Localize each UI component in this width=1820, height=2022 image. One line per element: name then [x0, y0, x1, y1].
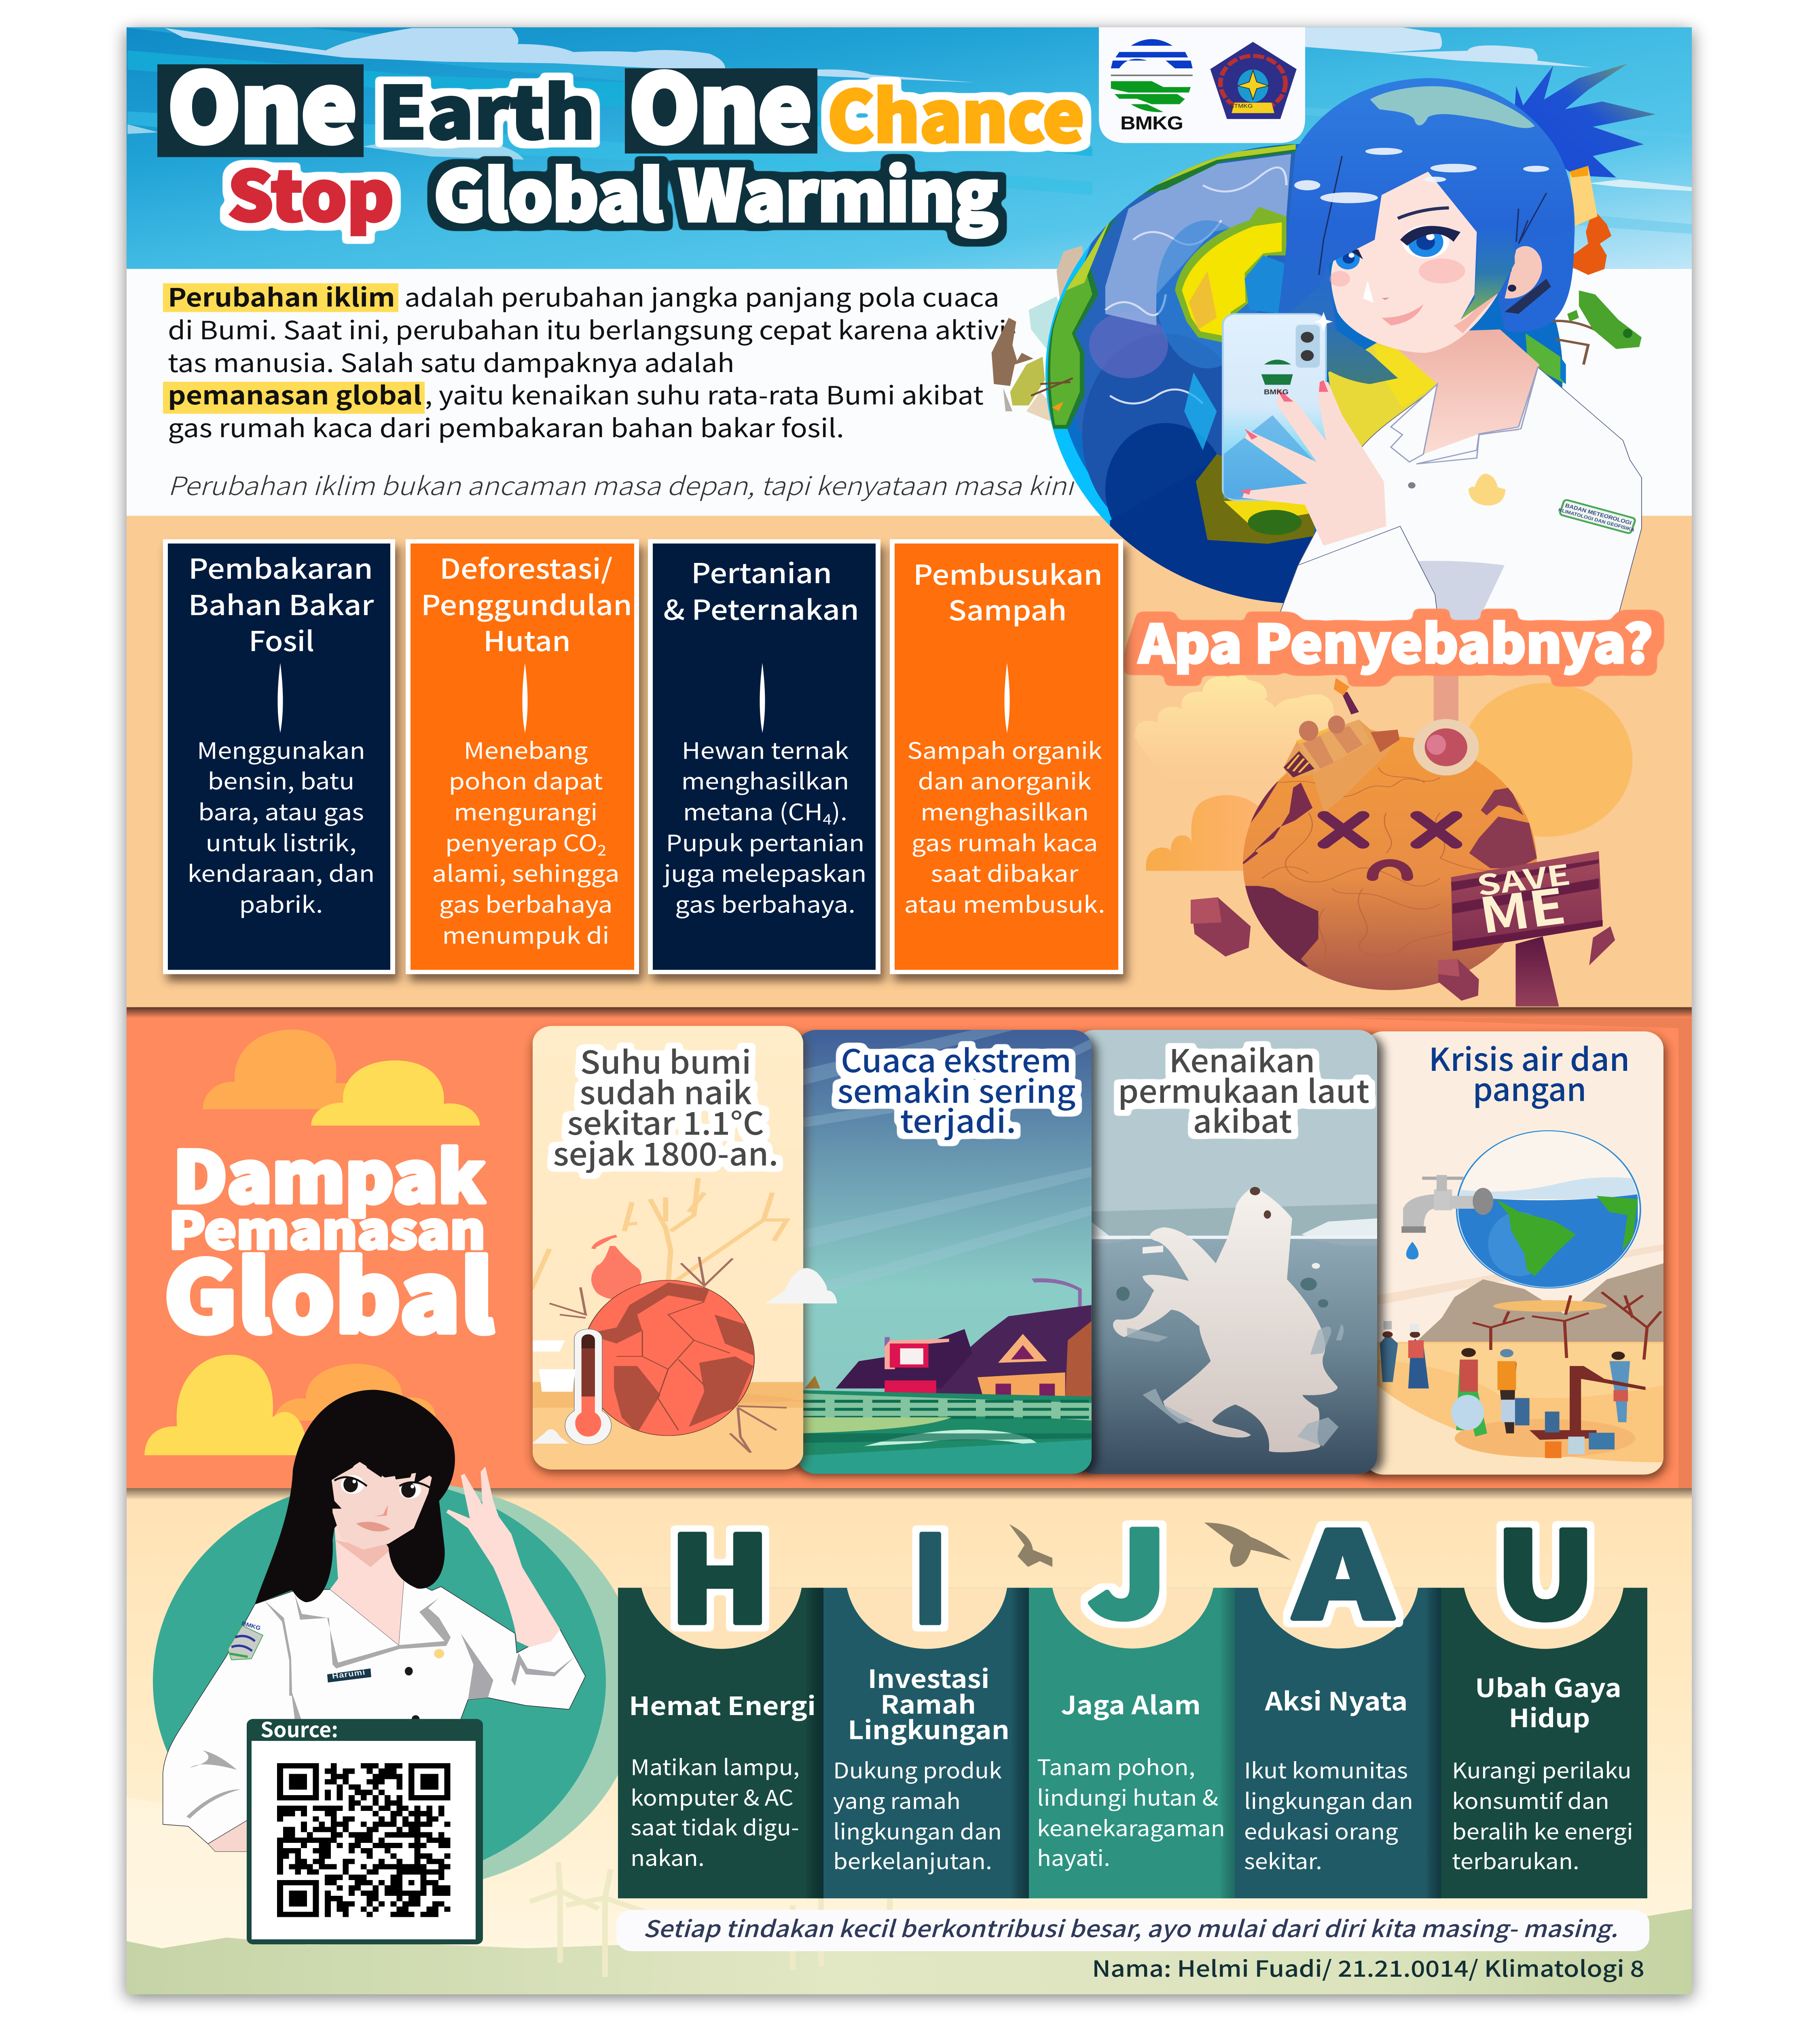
closing message pill: Setiap tindakan kecil berkontribusi besar, ayo mulai dari diri kita masing- masing.	[643, 1911, 1618, 1944]
card: waste: Pembusukan	[913, 553, 1103, 593]
illustration: girl with peace sign	[163, 1390, 585, 1852]
heading: Dampak Pemanasan Global: Global	[164, 1220, 494, 1360]
card: fossil fuel: kendaraan, dan	[188, 856, 375, 888]
card: deforestation: alami, sehingga	[432, 856, 620, 888]
factory	[1284, 719, 1399, 813]
card: waste: dan anorganik	[918, 764, 1092, 796]
intro text block: tas manusia. Salah satu dampaknya adalah	[168, 343, 734, 380]
heading	[1428, 1034, 1630, 1110]
column: Ubah Gaya Hidup: beralih ke energi	[1452, 1815, 1633, 1846]
heading: permukaan laut	[1118, 1066, 1369, 1112]
column: Investasi Ramah Lingkungan: yang ramah	[833, 1784, 961, 1815]
intro text block: pemanasan global	[168, 376, 422, 412]
card: waste: atau membusuk.	[904, 887, 1105, 920]
card: fossil fuel	[165, 541, 393, 972]
card: waste	[892, 541, 1121, 972]
column: Aksi Nyata: Aksi Nyata	[1264, 1681, 1407, 1718]
title word Earth: Earth	[378, 56, 595, 160]
card: deforestation: Penggundulan	[421, 584, 632, 623]
panel: HIJAU action columns	[618, 1480, 1647, 1898]
column: Aksi Nyata: sekitar.	[1244, 1844, 1322, 1876]
teal backdrop circle	[153, 1480, 641, 1889]
card: fossil fuel: Bahan Bakar	[188, 584, 374, 623]
frown	[1373, 863, 1407, 877]
orange flowers	[1572, 209, 1611, 275]
cloud pale	[1134, 674, 1340, 788]
patch	[228, 1626, 263, 1660]
column: Hemat Energi: saat tidak digu-	[631, 1811, 799, 1842]
title words Global Warming: Global Warming	[434, 141, 998, 241]
letter J: J	[1088, 1480, 1167, 1652]
column: Jaga Alam: lindungi hutan &	[1037, 1781, 1218, 1812]
small cloud	[766, 1268, 837, 1303]
intro text block: di Bumi. Saat ini, perubahan itu berlangsung cepat karena aktivi-	[168, 311, 1016, 347]
illustration: trees beside globe	[992, 290, 1642, 411]
heading: Kenaikan	[1169, 1035, 1315, 1081]
column: Hemat Energi: Hemat Energi	[629, 1686, 816, 1723]
card: waste: Sampah	[948, 589, 1067, 628]
eyes	[341, 1475, 364, 1494]
intro text block: Perubahan iklim bukan ancaman masa depan, tapi kenyataan masa kini	[168, 466, 1076, 503]
column: Jaga Alam: keanekaragaman	[1037, 1811, 1225, 1842]
card: waste: gas rumah kaca	[912, 825, 1098, 858]
panel: sky header	[127, 27, 1693, 269]
panel: intro white band	[127, 269, 1692, 516]
heading: sejak 1800-an.	[553, 1129, 778, 1174]
small clouds and sand	[531, 1340, 575, 1392]
card: farming: juga melepaskan	[662, 856, 866, 888]
logos panel	[1099, 27, 1305, 143]
earth map on hair	[1370, 86, 1535, 128]
face	[331, 1462, 432, 1550]
card: fossil fuel: pabrik.	[239, 887, 323, 920]
heading: sudah naik	[580, 1068, 752, 1113]
thermometer	[1434, 672, 1458, 732]
column: Ubah Gaya Hidup: Kurangi perilaku	[1452, 1753, 1632, 1785]
rocks	[1191, 897, 1251, 956]
card: farming: metana (CH	[683, 795, 823, 827]
heading: Cuaca ekstrem	[841, 1035, 1071, 1081]
card: fossil fuel: Menggunakan	[197, 733, 365, 766]
hair spikes	[1514, 63, 1655, 178]
sign text: SAVE	[1474, 852, 1573, 904]
dead trees pale	[531, 1178, 787, 1289]
card: farming: 4	[823, 808, 832, 829]
letter I: I	[913, 1485, 947, 1657]
panel: recommendations background	[127, 1488, 1692, 1995]
QR code	[277, 1763, 450, 1917]
column: Aksi Nyata: Ikut komunitas	[1244, 1753, 1408, 1785]
eyes	[1403, 225, 1449, 258]
houses	[931, 1305, 1092, 1401]
logo STMKG: STMKG	[1230, 103, 1253, 109]
hand	[1242, 382, 1386, 546]
column: Ubah Gaya Hidup: konsumtif dan	[1452, 1784, 1609, 1815]
logo BMKG: BMKG	[1120, 113, 1183, 133]
hills and wind turbines	[127, 1862, 1692, 1995]
ear	[1505, 246, 1542, 298]
neck	[330, 1524, 410, 1645]
sign text: ME	[1474, 867, 1570, 948]
letter H: H	[669, 1485, 770, 1657]
letter A: A	[1292, 1481, 1393, 1652]
heading: Apa Penyebabnya: Apa Penyebabnya?	[1138, 602, 1653, 678]
column: Investasi Ramah Lingkungan: lingkungan dan	[833, 1815, 1002, 1846]
card: farming: & Peternakan	[663, 588, 859, 628]
title word One 1: One	[168, 33, 357, 169]
illustration: girl with earth hair and phone	[1223, 63, 1655, 632]
left hand	[208, 1821, 247, 1852]
pump	[1570, 1366, 1646, 1430]
heading: sekitar 1.1°C	[567, 1098, 764, 1144]
card: sea level rise	[1072, 1030, 1383, 1476]
heading: semakin sering	[837, 1066, 1075, 1112]
sleeve	[1272, 526, 1439, 632]
card: fossil fuel: untuk listrik,	[205, 825, 356, 858]
card: temperature rise	[531, 1026, 837, 1474]
panel: causes background	[127, 516, 1692, 1007]
card: deforestation: menumpuk di	[442, 918, 609, 950]
card: deforestation: mengurangi	[454, 795, 597, 827]
illustration: dying earth	[1134, 672, 1632, 1007]
card: deforestation: penyerap CO	[445, 825, 597, 858]
author credit: Nama: Helmi Fuadi/ 21.21.0014/ Klimatologi 8	[1092, 1951, 1644, 1983]
column: Aksi Nyata	[1244, 1681, 1413, 1876]
card: fossil fuel: bensin, batu	[208, 764, 354, 796]
column: Hemat Energi	[629, 1686, 816, 1872]
back and long hair	[255, 1390, 455, 1604]
heading	[837, 1035, 1076, 1142]
fringe	[1279, 78, 1573, 321]
mouth	[356, 1522, 390, 1531]
illustration: earth globe with land	[1026, 138, 1577, 606]
shirt	[1272, 357, 1642, 632]
card: deforestation: pohon dapat	[449, 764, 603, 796]
heading: Dampak Pemanasan Global: Pemanasan	[169, 1191, 485, 1264]
card: deforestation: Hutan	[483, 620, 571, 659]
neck	[1379, 330, 1539, 454]
sun	[1461, 683, 1632, 837]
intro text block	[163, 278, 1076, 503]
clouds in impacts panel	[144, 1030, 480, 1455]
mouth and nose	[1382, 304, 1423, 326]
eyes	[1324, 815, 1456, 844]
card: water and food crisis	[1359, 1031, 1666, 1479]
column: Investasi Ramah Lingkungan: berkelanjutan.	[833, 1844, 992, 1876]
column: Investasi Ramah Lingkungan: Lingkungan	[848, 1710, 1009, 1747]
burnt earth	[593, 1236, 639, 1298]
title word Stop: Stop	[228, 141, 394, 241]
card: farming: ).	[832, 795, 847, 827]
card: deforestation: Menebang	[463, 733, 588, 766]
highlight pemanasan global	[163, 382, 425, 414]
column: Investasi Ramah Lingkungan: Dukung produk	[833, 1753, 1002, 1785]
QR source box: Source:	[260, 1713, 338, 1743]
shirt pin	[1469, 474, 1505, 506]
intro text block: gas rumah kaca dari pembakaran bahan bakar fosil.	[168, 408, 844, 445]
buttons	[405, 1667, 413, 1675]
column: Aksi Nyata: lingkungan dan	[1244, 1784, 1413, 1815]
collar	[1391, 366, 1538, 464]
tap	[1403, 1194, 1434, 1228]
card: farming: Pertanian	[691, 552, 832, 591]
birds	[1009, 1523, 1291, 1567]
title word Chance: Chance	[827, 61, 1084, 163]
card shadows	[167, 546, 1127, 981]
shirt badge: BADAN METEOROLOGI	[1564, 503, 1632, 526]
card: fossil fuel: bara, atau gas	[198, 795, 364, 827]
column: Aksi Nyata: edukasi orang	[1244, 1815, 1398, 1846]
card: fossil fuel: Fosil	[249, 620, 314, 659]
logo BMKG	[1111, 39, 1193, 133]
column: Ubah Gaya Hidup: Hidup	[1509, 1698, 1590, 1735]
water globe	[1457, 1131, 1640, 1288]
raised arm	[447, 1467, 560, 1647]
card: waste: Sampah organik	[907, 733, 1102, 766]
column backgrounds	[618, 1588, 1647, 1898]
heading: Dampak Pemanasan Global: Dampak	[173, 1121, 485, 1223]
card: deforestation	[408, 541, 637, 972]
column: Hemat Energi: nakan.	[631, 1841, 705, 1872]
column: Investasi Ramah Lingkungan	[833, 1659, 1009, 1876]
QR source box	[247, 1713, 483, 1944]
card: deforestation: Deforestasi/	[440, 547, 613, 587]
column: Hemat Energi: komputer & AC	[631, 1781, 794, 1812]
shirt badge	[1557, 499, 1638, 535]
title word One 2: One	[629, 35, 812, 169]
card: fossil fuel: Pembakaran	[188, 547, 373, 587]
letter U: U	[1496, 1481, 1595, 1652]
heading: pangan	[1473, 1064, 1586, 1110]
flood water	[797, 1390, 1092, 1475]
card: farming: menghasilkan	[681, 764, 849, 796]
heading	[1118, 1035, 1369, 1142]
dead trees	[1473, 1292, 1661, 1360]
phone	[1223, 314, 1326, 500]
lamp post	[1032, 1278, 1081, 1400]
column: Ubah Gaya Hidup: terbarukan.	[1452, 1844, 1579, 1876]
bangs	[295, 1396, 447, 1509]
card: waste: menghasilkan	[921, 795, 1089, 827]
panel: impact cards	[531, 1026, 1666, 1479]
heading: akibat	[1193, 1096, 1292, 1142]
heading: Dampak Pemanasan Global	[164, 1121, 494, 1360]
name tag text: Harumi	[331, 1668, 366, 1681]
intro text block: Perubahan iklim	[168, 278, 395, 314]
phone logo mark	[1261, 360, 1293, 385]
heading: terjadi.	[900, 1096, 1016, 1142]
column: Ubah Gaya Hidup	[1452, 1668, 1633, 1876]
logo STMKG	[1210, 42, 1297, 119]
planet	[1239, 735, 1541, 992]
intro text block: , yaitu kenaikan suhu rata-rata Bumi akibat	[425, 376, 984, 412]
heading	[553, 1037, 778, 1174]
card: deforestation: 2	[597, 839, 606, 860]
card: waste: saat dibakar	[931, 856, 1079, 888]
face	[1331, 171, 1498, 353]
back hair	[1277, 78, 1575, 384]
shirt badge: KLIMATOLOGI DAN GEOFISIKA	[1558, 507, 1635, 533]
shirt	[163, 1577, 585, 1852]
title	[157, 33, 1084, 241]
polar bear	[1113, 1187, 1337, 1452]
card: farming: Pupuk pertanian	[666, 825, 864, 858]
patch text: BMKG	[241, 1620, 262, 1632]
people	[1380, 1334, 1398, 1382]
panel: impacts background	[127, 1007, 1692, 1488]
panel: cause cards	[165, 541, 1127, 981]
card: deforestation: gas berbahaya	[439, 887, 612, 920]
column: Hemat Energi: Matikan lampu,	[631, 1750, 800, 1781]
card: farming	[650, 541, 878, 972]
highlight perubahan iklim	[163, 283, 398, 312]
column: Investasi Ramah Lingkungan: Investasi	[868, 1659, 989, 1696]
name tag	[327, 1669, 371, 1682]
heading: Suhu bumi	[580, 1037, 751, 1083]
sign	[1515, 936, 1559, 1007]
card: extreme weather	[794, 1030, 1097, 1476]
thermometer	[565, 1329, 612, 1445]
card: farming: Hewan ternak	[682, 733, 849, 766]
column: Ubah Gaya Hidup: Ubah Gaya	[1475, 1668, 1621, 1705]
column: Jaga Alam: Tanam pohon,	[1037, 1750, 1195, 1781]
cloud orange	[1146, 795, 1266, 871]
collar shadows	[295, 1595, 451, 1669]
card: farming: gas berbahaya.	[675, 887, 855, 920]
intro text block: adalah perubahan jangka panjang pola cuaca	[404, 278, 999, 314]
heading: Krisis air dan	[1428, 1034, 1630, 1080]
phone logo BMKG: BMKG	[1264, 388, 1289, 396]
column: Jaga Alam	[1037, 1686, 1225, 1872]
column: Jaga Alam: hayati.	[1037, 1841, 1110, 1872]
column: Investasi Ramah Lingkungan: Ramah	[880, 1685, 976, 1721]
column: Jaga Alam: Jaga Alam	[1061, 1686, 1201, 1722]
